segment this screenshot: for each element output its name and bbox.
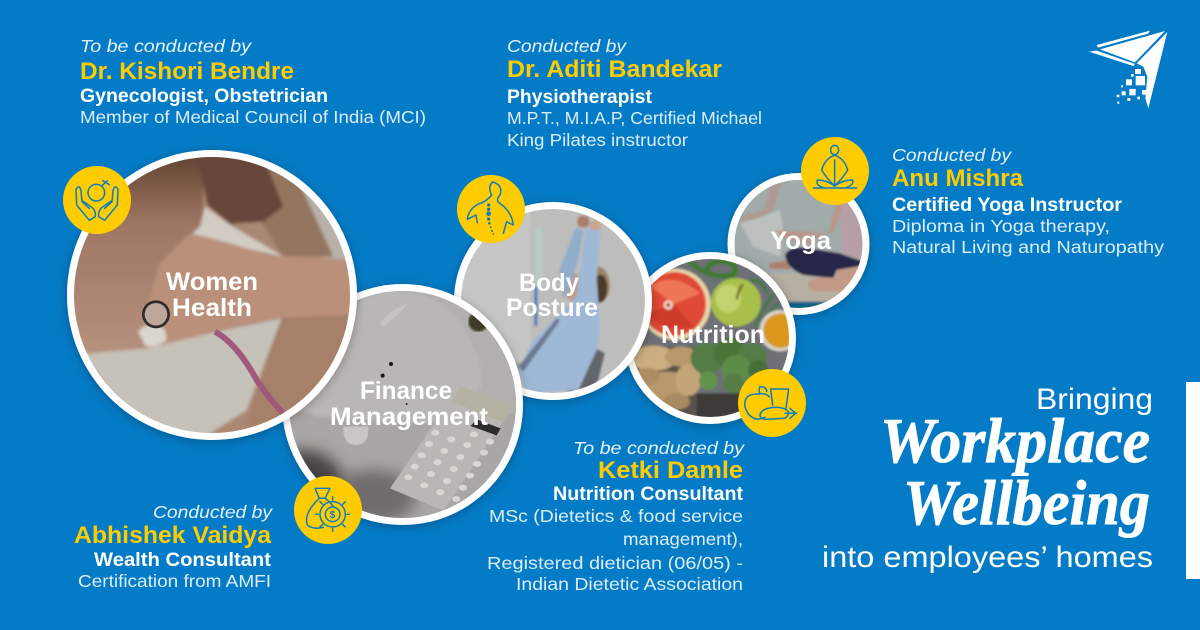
- circle labels: Posture: [506, 294, 598, 322]
- text block: Ketki Damle: Ketki Damle: [598, 457, 743, 484]
- photo: body posture: [461, 209, 645, 393]
- calculator: [390, 413, 502, 510]
- circle: Yoga: [722, 170, 874, 322]
- text block: Kishori Bendre: Member of Medical Council of India (MCI): [80, 107, 426, 127]
- circle labels: Health: [172, 294, 252, 322]
- text block: Anu Mishra: Diploma in Yoga therapy,: [892, 216, 1110, 236]
- text block: Abhishek Vaidya: Certification from AMFI: [78, 571, 271, 591]
- text block: Kishori Bendre: [80, 36, 426, 127]
- text block: Anu Mishra: Anu Mishra: [892, 165, 1023, 192]
- text block: Aditi Bandekar: Dr. Aditi Bandekar: [507, 56, 722, 83]
- text block: Abhishek Vaidya: [74, 502, 273, 591]
- photo: finance: [290, 291, 516, 518]
- circle labels: [166, 227, 832, 431]
- text block: Abhishek Vaidya: Wealth Consultant: [94, 550, 272, 571]
- text block: Kishori Bendre: Dr. Kishori Bendre: [80, 58, 294, 85]
- spine dots: [486, 203, 494, 235]
- headline: [822, 383, 1153, 574]
- circle labels: Body: [519, 269, 579, 297]
- text block: Anu Mishra: Conducted by: [892, 145, 1012, 165]
- text block: Ketki Damle: [487, 438, 745, 594]
- text block: Anu Mishra: Certified Yoga Instructor: [892, 195, 1123, 216]
- icon: yoga: [801, 137, 869, 205]
- text block: Abhishek Vaidya: Abhishek Vaidya: [74, 522, 271, 549]
- icon: body posture: [457, 175, 525, 243]
- text block: Ketki Damle: MSc (Dietetics & food service: [489, 506, 743, 526]
- dollar sign: $: [330, 510, 336, 521]
- text block: Aditi Bandekar: M.P.T., M.I.A.P, Certified Michael: [507, 108, 762, 128]
- text block: Aditi Bandekar: King Pilates instructor: [507, 130, 688, 150]
- text block: Ketki Damle: To be conducted by: [573, 438, 745, 458]
- text block: Ketki Damle: management),: [623, 529, 743, 549]
- text block: Aditi Bandekar: Conducted by: [507, 36, 627, 56]
- text block: Anu Mishra: Natural Living and Naturopathy: [892, 237, 1164, 257]
- circle: Finance Management: [279, 281, 528, 532]
- headline: Workplace: [880, 405, 1150, 476]
- icon: finance: [294, 476, 362, 544]
- icon: nutrition: [738, 369, 806, 437]
- text block: Ketki Damle: Indian Dietetic Association: [516, 574, 743, 594]
- circle labels: Finance: [360, 377, 452, 405]
- text block: Ketki Damle: Nutrition Consultant: [553, 484, 744, 505]
- circle labels: Management: [330, 403, 489, 431]
- photo: nutrition: [634, 259, 789, 417]
- circle: Women Health: [57, 150, 363, 443]
- text block: Kishori Bendre: Gynecologist, Obstetrician: [80, 86, 328, 107]
- white side bar: [1186, 382, 1200, 579]
- logo: paper plane: [1089, 31, 1167, 108]
- text block: Aditi Bandekar: Physiotherapist: [507, 87, 653, 108]
- circle labels: Yoga: [770, 227, 832, 255]
- circle: Body Posture: [450, 200, 657, 407]
- icon: women health: [63, 166, 131, 234]
- text block: Kishori Bendre: To be conducted by: [80, 36, 252, 56]
- headline: Wellbeing: [903, 467, 1150, 538]
- text block: Anu Mishra: [892, 145, 1164, 257]
- circle: Nutrition: [617, 243, 803, 430]
- text block: Abhishek Vaidya: Conducted by: [153, 502, 273, 522]
- headline: Bringing: [1036, 383, 1153, 416]
- photo: yoga: [734, 180, 862, 308]
- text block: Ketki Damle: Registered dietician (06/05) -: [487, 553, 743, 573]
- headline: into employees’ homes: [822, 541, 1153, 574]
- photo: women health: [74, 157, 350, 433]
- circle labels: Nutrition: [661, 321, 765, 349]
- text block: Aditi Bandekar: [507, 36, 762, 150]
- label: women health: Women: [166, 268, 258, 296]
